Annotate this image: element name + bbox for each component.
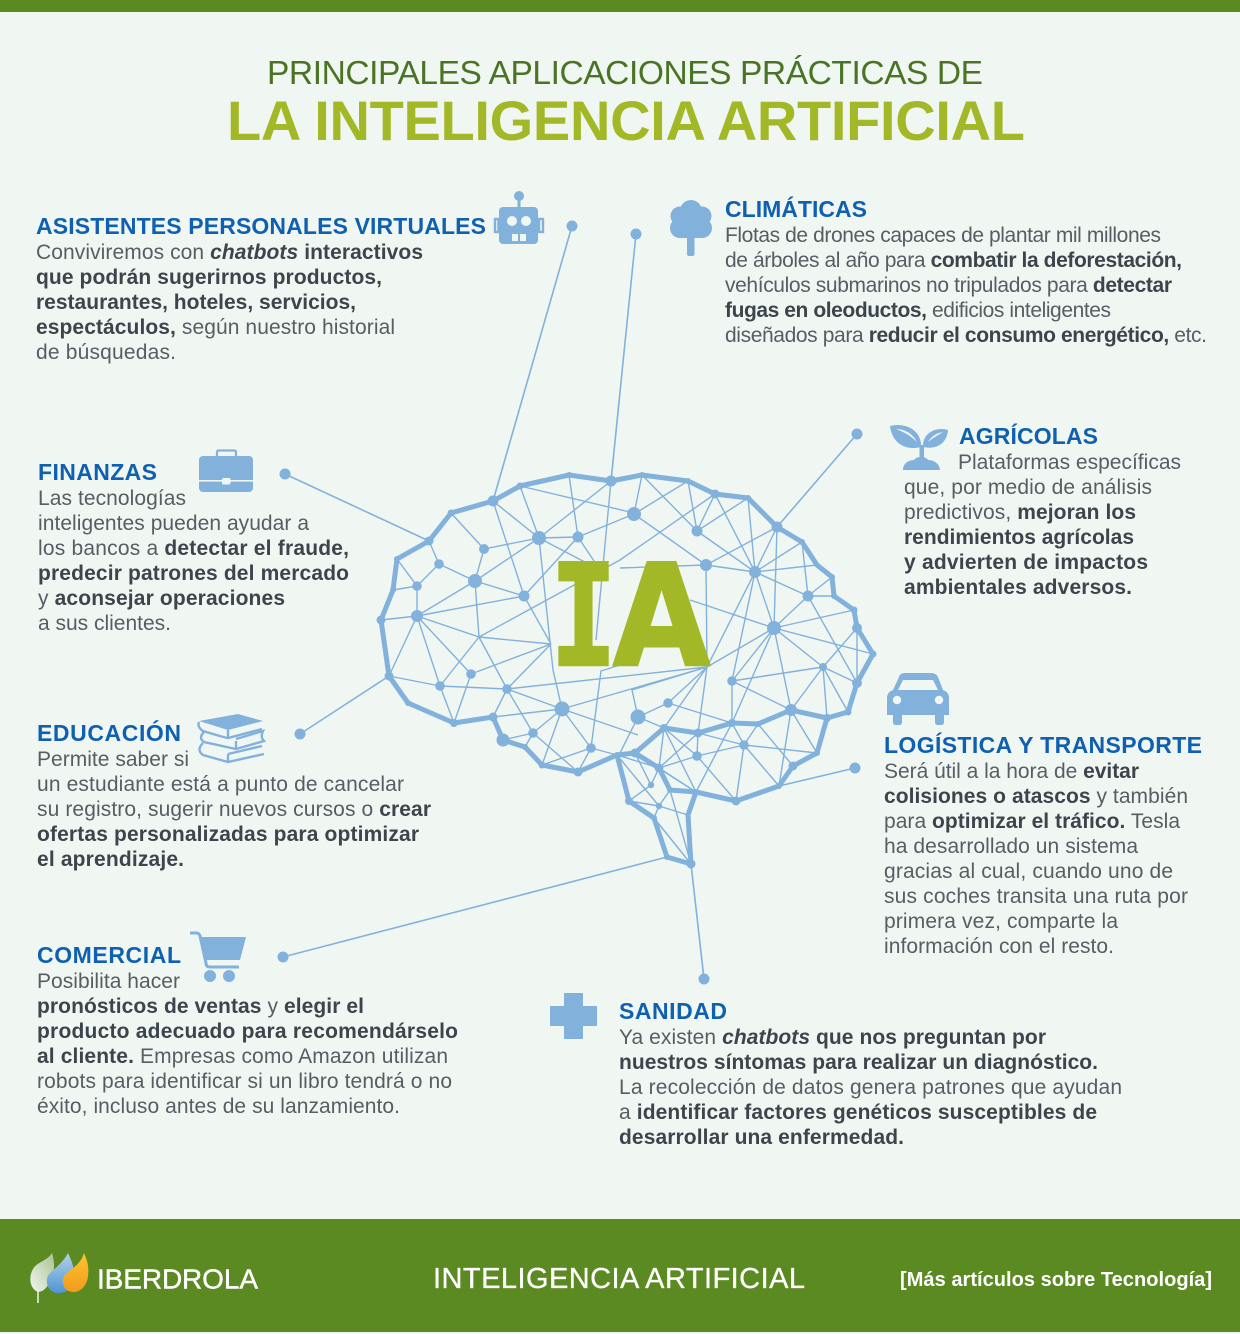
IA lettering: A — [613, 535, 710, 699]
icon: robot — [495, 191, 543, 244]
text block: su registro, sugerir nuevos cursos o crear — [37, 798, 431, 821]
footer band — [0, 1219, 1240, 1332]
text block — [37, 748, 431, 871]
text block: colisiones o atascos y también — [884, 785, 1188, 808]
text block: éxito, incluso antes de su lanzamiento. — [37, 1095, 400, 1118]
text block: a identificar factores genéticos susceptibles de — [619, 1101, 1097, 1124]
text block: gracias al cual, cuando uno de — [884, 860, 1173, 883]
heading: LOGÍSTICA Y TRANSPORTE — [884, 731, 1202, 758]
heading: FINANZAS — [38, 459, 157, 485]
title: PRINCIPALES APLICACIONES PRÁCTICAS DE — [267, 55, 983, 92]
text block: ofertas personalizadas para optimizar — [37, 823, 419, 846]
text block: y advierten de impactos — [904, 551, 1148, 574]
heading: CLIMÁTICAS — [725, 195, 867, 222]
text block: primera vez, comparte la — [884, 910, 1118, 933]
IA lettering: I — [550, 534, 617, 698]
text block: ha desarrollado un sistema — [884, 835, 1138, 858]
text block: Será útil a la hora de evitar — [884, 760, 1139, 783]
text block: información con el resto. — [884, 935, 1114, 958]
text block: Las tecnologías — [38, 487, 186, 510]
heading: EDUCACIÓN — [37, 719, 181, 746]
text block: diseñados para reducir el consumo energético, etc. — [725, 324, 1207, 347]
icon: briefcase — [199, 450, 253, 492]
heading: AGRÍCOLAS — [959, 422, 1098, 449]
text block: pronósticos de ventas y elegir el — [37, 995, 364, 1018]
heading: COMERCIAL — [37, 942, 181, 968]
text block: los bancos a detectar el fraude, — [38, 537, 349, 560]
panel: agrícolas — [904, 422, 1181, 599]
logo: Iberdrola leaves — [30, 1253, 88, 1303]
text block: predictivos, mejoran los — [904, 501, 1136, 524]
panel: finanzas — [38, 459, 349, 635]
logo wordmark: IBERDROLA — [97, 1264, 258, 1294]
panel: asistentes personales virtuales — [36, 213, 486, 364]
text block — [38, 487, 349, 635]
text block — [725, 224, 1207, 347]
thin network links — [381, 475, 873, 864]
panel: sanidad — [619, 998, 1122, 1149]
text block: que podrán sugerirnos productos, — [36, 266, 382, 289]
icon: sprout — [890, 425, 948, 470]
network nodes — [278, 220, 876, 984]
text block — [37, 970, 458, 1118]
footer title: INTELIGENCIA ARTIFICIAL — [433, 1263, 805, 1295]
text block: desarrollar una enfermedad. — [619, 1126, 904, 1149]
text block: ambientales adversos. — [904, 576, 1132, 599]
brain network diagram — [278, 220, 876, 984]
heading: ASISTENTES PERSONALES VIRTUALES — [36, 213, 486, 239]
text block: Conviviremos con chatbots interactivos — [36, 241, 423, 264]
text block — [36, 241, 423, 364]
text block: y aconsejar operaciones — [38, 587, 285, 610]
text block: nuestros síntomas para realizar un diagnóstico. — [619, 1051, 1098, 1074]
text block: restaurantes, hoteles, servicios, — [36, 291, 356, 314]
title: LA INTELIGENCIA ARTIFICIAL — [227, 89, 1025, 152]
text block: a sus clientes. — [38, 612, 171, 635]
text block: Ya existen chatbots que nos preguntan por — [619, 1026, 1046, 1049]
text block: Posibilita hacer — [37, 970, 180, 993]
icon: medical cross — [550, 993, 597, 1039]
text block: un estudiante está a punto de cancelar — [37, 773, 404, 796]
text block — [884, 760, 1188, 958]
panel: educación — [37, 719, 431, 871]
text block: inteligentes pueden ayudar a — [38, 512, 309, 535]
text block: vehículos submarinos no tripulados para detectar — [725, 274, 1172, 297]
IA lettering — [550, 534, 710, 699]
icon: tree — [670, 200, 712, 256]
panel: comercial — [37, 942, 458, 1118]
text block — [904, 451, 1181, 599]
thick brain outline — [381, 475, 873, 864]
heading: SANIDAD — [619, 998, 727, 1024]
text block: predecir patrones del mercado — [38, 562, 349, 585]
text block: de búsquedas. — [36, 341, 176, 364]
text block — [619, 1026, 1122, 1149]
text block: rendimientos agrícolas — [904, 526, 1134, 549]
text block: al cliente. Empresas como Amazon utilizan — [37, 1045, 448, 1068]
title — [227, 55, 1025, 152]
icon: car — [887, 673, 949, 725]
text block: robots para identificar si un libro tendrá o no — [37, 1070, 452, 1093]
top bar — [0, 0, 1240, 12]
footer link: [Más artículos sobre Tecnología] — [900, 1269, 1212, 1291]
text block: sus coches transita una ruta por — [884, 885, 1188, 908]
text block: para optimizar el tráfico. Tesla — [884, 810, 1180, 833]
text block: La recolección de datos genera patrones que ayudan — [619, 1076, 1122, 1099]
text block: producto adecuado para recomendárselo — [37, 1020, 458, 1043]
icon: shopping cart — [190, 933, 246, 982]
text block: Flotas de drones capaces de plantar mil millones — [725, 224, 1161, 247]
icon: books — [198, 714, 264, 762]
text block: Plataformas específicas — [958, 451, 1181, 474]
text block: de árboles al año para combatir la deforestación, — [725, 249, 1182, 272]
text block: el aprendizaje. — [37, 848, 184, 871]
text block: fugas en oleoductos, edificios inteligentes — [725, 299, 1111, 322]
text block: espectáculos, según nuestro historial — [36, 316, 395, 339]
panel: logística y transporte — [884, 731, 1202, 958]
text block: Permite saber si — [37, 748, 189, 771]
panel: climáticas — [725, 195, 1207, 347]
text block: que, por medio de análisis — [904, 476, 1152, 499]
connector lines to topics — [283, 226, 857, 979]
